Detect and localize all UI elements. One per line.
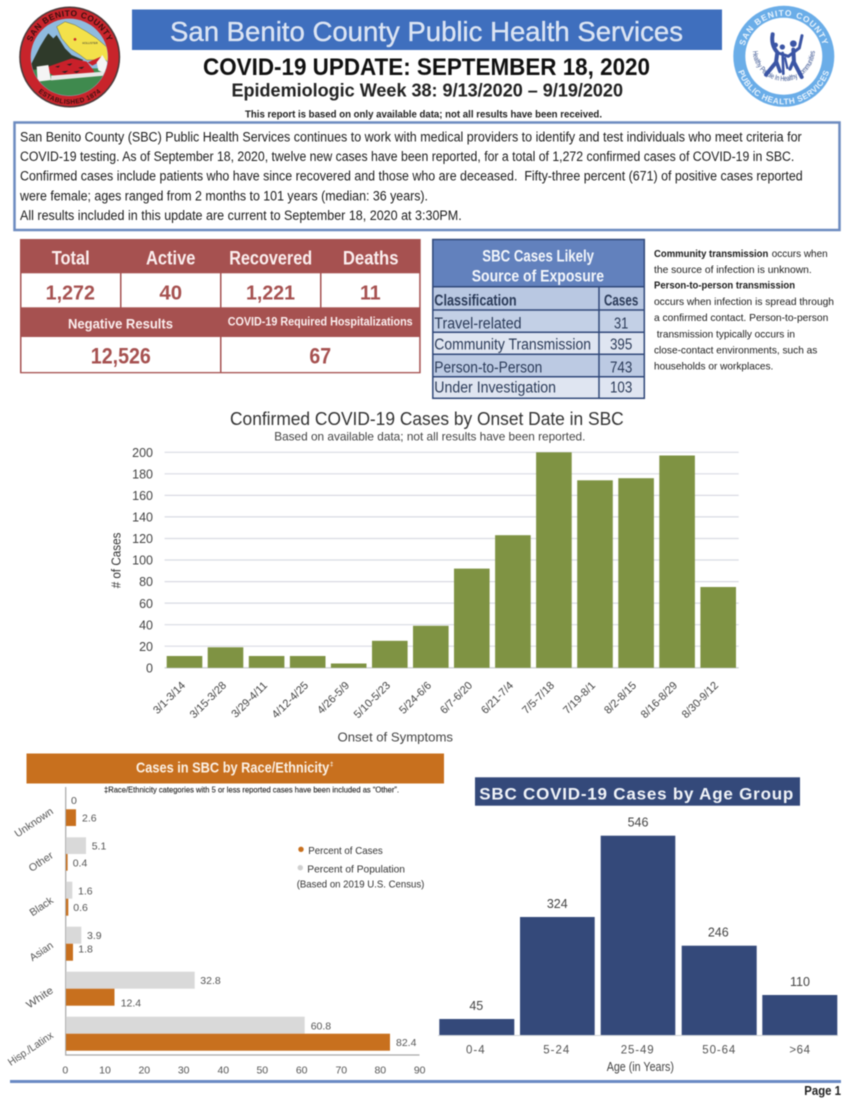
- panel: likely source of exposure table: 31: [614, 315, 628, 332]
- age value labels: 246: [708, 926, 729, 940]
- category labels: Black: [27, 894, 56, 919]
- y axis labels: 100: [132, 554, 153, 568]
- text block: transmission definitions: households or workplaces.: [654, 361, 773, 373]
- value labels: 5.1: [92, 840, 106, 852]
- text block: transmission definitions: Community transmission: [654, 248, 768, 260]
- text block: transmission definitions: occurs when infection is spread through: [654, 296, 834, 308]
- panel: summary text box: COVID-19 testing. As of September 18, 2020, twelve new cases have been reported, for a total of 1,272 confirmed cases of COVID-19 in SBC.: [20, 149, 794, 164]
- y axis title: # of Cases: [108, 532, 124, 588]
- panel: summary text box: San Benito County (SBC) Public Health Services continues to work with medical providers to identify and test individuals who meet criteria for: [20, 130, 802, 144]
- panel: likely source of exposure table: Source of Exposure: [472, 268, 604, 286]
- panel: summary text box: [14, 122, 840, 230]
- orange case bars: [66, 809, 390, 1051]
- age category labels: [466, 1044, 811, 1056]
- value labels: 82.4: [396, 1037, 417, 1049]
- category labels: [6, 805, 56, 1069]
- x axis ticks: 90: [414, 1064, 426, 1076]
- value labels: 0.4: [73, 858, 87, 870]
- x axis ticks: 40: [217, 1064, 229, 1076]
- panel: case totals table: 1,221: [246, 282, 295, 304]
- value labels: 0: [71, 795, 77, 807]
- panel: case totals table: Total: [52, 248, 90, 269]
- category labels: Hisp./Latinx: [6, 1029, 56, 1069]
- value labels: 60.8: [311, 1020, 331, 1032]
- legend: [297, 845, 424, 890]
- text block: transmission definitions: [654, 248, 834, 373]
- age value labels: [469, 816, 810, 1013]
- text block: transmission definitions: the source of infection is unknown.: [654, 264, 812, 276]
- panel: case totals table: COVID-19 Required Hospitalizations: [228, 315, 413, 329]
- panel: case totals table: 11: [360, 282, 381, 304]
- value labels: 3.9: [87, 930, 102, 942]
- panel: summary text box: were female; ages ranged from 2 months to 101 years (median: 36 years).: [19, 188, 428, 204]
- y axis labels: [132, 446, 153, 675]
- x axis ticks: 60: [296, 1064, 308, 1076]
- age category labels: >64: [789, 1044, 811, 1056]
- y axis labels: 80: [139, 575, 153, 589]
- x axis labels: 7/19-8/1: [561, 680, 598, 717]
- race chart header: Cases in SBC by Race/Ethnicity: [136, 760, 330, 777]
- y axis labels: 140: [132, 510, 153, 524]
- x axis labels: [151, 680, 721, 721]
- icon: San Benito County seal: SAN BENITO COUNTY: [26, 10, 114, 42]
- panel: case totals table: 12,526: [91, 343, 151, 368]
- icon: Public Health Services logo: SAN BENITO COUNTY: [739, 9, 829, 46]
- chart: cases by age group: [438, 777, 838, 1074]
- subheading: epidemiologic week: Epidemiologic Week 38: 9/13/2020 – 9/19/2020: [232, 80, 623, 101]
- y axis labels: 60: [139, 597, 153, 611]
- x axis labels: 3/29-4/11: [229, 680, 270, 720]
- panel: case totals table: Deaths: [343, 248, 399, 269]
- y axis labels: 20: [139, 640, 153, 654]
- chart: confirmed cases by onset date: [108, 408, 739, 745]
- panel: summary text box: Confirmed cases include patients who have since recovered and those who are deceased. Fifty-three percent (671) of positive cases reported: [20, 169, 803, 184]
- x axis ticks: 0: [62, 1064, 68, 1076]
- x axis labels: 7/5-7/18: [520, 680, 557, 717]
- x axis labels: 6/7-6/20: [438, 680, 475, 717]
- age chart header: SBC COVID-19 Cases by Age Group: [479, 784, 793, 803]
- x axis labels: 4/26-5/9: [315, 680, 352, 717]
- chart title: Confirmed COVID-19 Cases by Onset Date in SBC: [230, 408, 624, 429]
- age bars: [439, 836, 837, 1035]
- x axis ticks: 10: [99, 1064, 111, 1076]
- panel: likely source of exposure table: Classification: [434, 293, 517, 310]
- panel: case totals table: Active: [146, 248, 195, 269]
- value labels: 12.4: [121, 998, 141, 1010]
- icon: San Benito County seal: [18, 6, 121, 108]
- age value labels: 324: [547, 897, 568, 911]
- text block: transmission definitions: Person-to-person transmission: [654, 280, 795, 292]
- panel: case totals table: Recovered: [229, 248, 312, 269]
- race chart header: [26, 754, 444, 784]
- age chart header: [475, 777, 800, 806]
- x axis labels: 8/16-8/29: [639, 680, 680, 721]
- panel: likely source of exposure table: Community Transmission: [434, 336, 591, 353]
- panel: likely source of exposure table: [432, 240, 644, 398]
- x axis ticks: 50: [256, 1064, 268, 1076]
- icon: San Benito County seal: HOLLISTER: [82, 41, 98, 45]
- panel: likely source of exposure table: 103: [610, 380, 632, 397]
- x axis labels: 5/24-6/6: [397, 680, 434, 717]
- category labels: Unknown: [12, 805, 56, 840]
- age category labels: 0-4: [466, 1044, 485, 1056]
- panel: likely source of exposure table: 395: [610, 336, 632, 353]
- x axis labels: 4/12-4/25: [270, 680, 311, 721]
- x axis labels: 8/30-9/12: [680, 680, 721, 721]
- panel: likely source of exposure table: 743: [610, 359, 632, 376]
- icon: Public Health Services logo: PUBLIC HEALTH SERVICES: [738, 69, 830, 105]
- title banner: [132, 10, 722, 50]
- x axis title: Onset of Symptoms: [338, 730, 453, 745]
- race chart footnote: ‡Race/Ethnicity categories with 5 or less reported cases have been included as “Other”.: [104, 786, 399, 795]
- text block: transmission definitions: transmission typically occurs in: [657, 329, 795, 341]
- value labels: 32.8: [200, 975, 221, 987]
- value labels: 1.8: [78, 943, 93, 955]
- y axis labels: 160: [132, 489, 153, 503]
- legend: Percent of Cases: [308, 845, 383, 857]
- panel: likely source of exposure table: Cases: [604, 293, 638, 310]
- panel: case totals table: 67: [309, 343, 331, 368]
- panel: likely source of exposure table: Travel-related: [434, 315, 522, 332]
- x axis ticks: 70: [335, 1064, 347, 1076]
- age category labels: 5-24: [543, 1044, 570, 1056]
- x axis labels: 3/15-3/28: [188, 680, 229, 721]
- panel: likely source of exposure table: Under Investigation: [434, 380, 556, 397]
- icon: Public Health Services logo: [732, 5, 835, 108]
- panel: case totals table: 1,272: [46, 282, 95, 304]
- x axis ticks: [62, 1064, 426, 1076]
- age value labels: 45: [469, 999, 483, 1013]
- value labels: [71, 795, 417, 1049]
- chart: cases by race and ethnicity: [6, 754, 444, 1076]
- bars: [167, 452, 736, 668]
- y axis labels: 0: [146, 661, 153, 675]
- category labels: White: [24, 984, 56, 1011]
- value labels: 1.6: [78, 885, 93, 897]
- age axis title: Age (in Years): [607, 1060, 674, 1074]
- title banner: San Benito County Public Health Services: [170, 16, 683, 47]
- text block: transmission definitions: a confirmed contact. Person-to-person: [654, 312, 828, 324]
- x axis labels: 8/2-8/15: [602, 680, 639, 717]
- legend: Percent of Population: [307, 864, 405, 876]
- page number: Page 1: [804, 1083, 841, 1098]
- icon: San Benito County seal: ESTABLISHED 1874: [38, 88, 101, 105]
- legend: (Based on 2019 U.S. Census): [297, 878, 424, 890]
- age category labels: 25-49: [621, 1044, 654, 1056]
- panel: summary text box: All results included in this update are current to September 18, 2020 at 3:30PM.: [20, 208, 462, 223]
- panel: case totals table: 40: [159, 282, 182, 304]
- panel: case totals table: Negative Results: [68, 315, 173, 331]
- panel: case totals table: [20, 239, 421, 373]
- race chart header: ‡: [330, 762, 333, 768]
- text block: transmission definitions: occurs when: [772, 248, 828, 260]
- x axis labels: 3/1-3/14: [151, 680, 188, 717]
- gray population bars: [66, 837, 305, 1034]
- x axis ticks: 30: [178, 1064, 190, 1076]
- report note: This report is based on only available data; not all results have been received.: [245, 108, 602, 120]
- heading: COVID-19 update date: COVID-19 UPDATE: SEPTEMBER 18, 2020: [203, 54, 650, 81]
- panel: likely source of exposure table: Person-to-Person: [434, 359, 542, 376]
- panel: likely source of exposure table: SBC Cases Likely: [482, 248, 595, 266]
- text block: transmission definitions: close-contact environments, such as: [654, 345, 817, 357]
- x axis labels: 6/21-7/4: [479, 680, 516, 717]
- age category labels: 50-64: [702, 1044, 736, 1056]
- y axis labels: 200: [132, 446, 153, 460]
- value labels: 2.6: [82, 812, 97, 824]
- age value labels: 546: [628, 816, 648, 830]
- chart subtitle: Based on available data; not all results have been reported.: [274, 430, 585, 444]
- y axis labels: 120: [132, 532, 153, 546]
- x axis ticks: 20: [138, 1064, 150, 1076]
- x axis ticks: 80: [374, 1064, 386, 1076]
- category labels: Asian: [27, 939, 56, 964]
- value labels: 0.6: [73, 902, 88, 914]
- y axis labels: 40: [139, 618, 153, 632]
- y axis labels: 180: [132, 468, 153, 482]
- icon: Public Health Services logo: Healthy People In Healthy Communities: [752, 50, 816, 82]
- x axis labels: 5/10-5/23: [352, 680, 393, 721]
- category labels: Other: [27, 849, 56, 875]
- age value labels: 110: [790, 975, 810, 989]
